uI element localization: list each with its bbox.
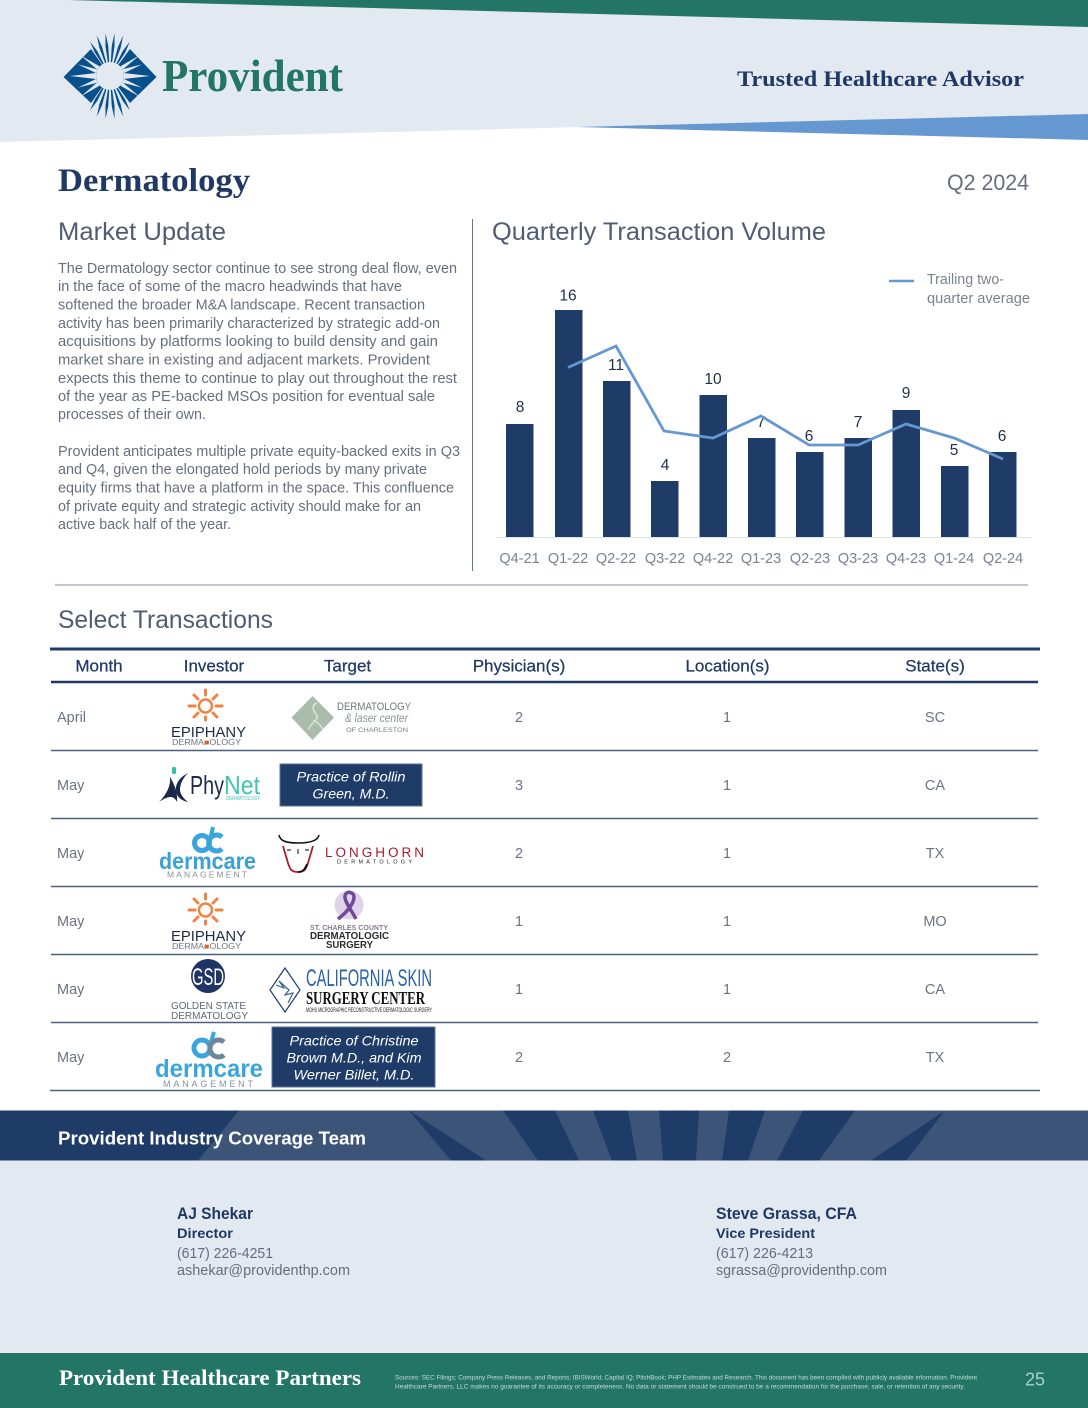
- bar chart: 10: [704, 371, 722, 388]
- heading: select transactions: Select Transactions: [58, 606, 273, 634]
- target box: Practice of Rollin Green: Practice of Rollin: [296, 768, 406, 784]
- row: May, Dermcare and Longhorn: TX: [926, 846, 945, 862]
- text block: market commentary: equity firms that have a platform in the space. This confluence: [58, 480, 454, 496]
- row: April: 2: [515, 710, 523, 726]
- bar chart: Q2-24: [983, 551, 1023, 567]
- logo: Dermatology and Laser Center of Charleston: [292, 696, 412, 740]
- contact: AJ Shekar: [177, 1205, 350, 1279]
- logo: PhyNet Dermatology: DERMATOLOGY: [226, 796, 260, 802]
- row: May, Golden State and California Skin: May: [57, 982, 85, 998]
- text block: market commentary: of the year as PE-backed MSOs position for eventual sale: [58, 389, 435, 405]
- bar chart: Q3-23: [838, 551, 878, 567]
- panel: quarterly transaction volume: [492, 218, 1032, 567]
- text block: market commentary: and Q4, given the elongated hold periods by many private: [58, 462, 427, 478]
- chart legend: Trailing two-: [927, 272, 1004, 288]
- text block: market commentary: active back half of the year.: [58, 517, 231, 533]
- logo: Dermatology and Laser Center of Charleston: OF CHARLESTON: [346, 728, 408, 734]
- heading: market update: Market Update: [58, 218, 226, 246]
- row: May, Golden State and California Skin: 1: [515, 982, 523, 998]
- footer disclaimer: [395, 1374, 977, 1390]
- row: May, Dermcare and Longhorn: [57, 827, 945, 880]
- heading: quarterly transaction volume: Quarterly Transaction Volume: [492, 218, 826, 246]
- contact: Steve Grassa: Steve Grassa, CFA: [716, 1205, 857, 1223]
- logo: California Skin Surgery Center: SURGERY CENTER: [306, 988, 426, 1008]
- text block: market commentary: in the face of some of the macro headwinds that have: [58, 279, 402, 295]
- footer disclaimer: Healthcare Partners, LLC makes no guarantee of its accuracy or completeness. No data or statement should be construed to be a recommendation for the purchase, sale, or retention of any security.: [395, 1384, 965, 1390]
- row: May, Golden State and California Skin: CA: [925, 982, 945, 998]
- row: May, PhyNet: CA: [925, 778, 945, 794]
- text block: market commentary: market share in existing and adjacent markets. Provident: [58, 352, 430, 368]
- logo: Epiphany Dermatology: [171, 690, 246, 747]
- table header: Physician(s): [473, 656, 565, 676]
- logo: PhyNet Dermatology: Phy: [190, 770, 224, 800]
- row: April: 1: [723, 710, 731, 726]
- header banner: [0, 0, 1088, 142]
- logo: PhyNet Dermatology: [159, 767, 261, 802]
- target box: Practice of Rollin Green: [280, 764, 422, 806]
- row: April: SC: [925, 710, 945, 726]
- row: May, Epiphany and St. Charles: 1: [515, 914, 523, 930]
- contact: Steve Grassa: [716, 1205, 887, 1279]
- bar chart: Q2-22: [596, 551, 636, 567]
- panel: select transactions table: [50, 649, 1040, 1090]
- row: May, Golden State and California Skin: 1: [723, 982, 731, 998]
- bar chart: 8: [516, 399, 524, 416]
- table header: Location(s): [685, 656, 770, 676]
- tagline: Trusted Healthcare Advisor: [737, 66, 1024, 91]
- target box: Practice of Christine Brown and Kim Werner Billet: [272, 1027, 435, 1087]
- footer disclaimer: Sources: SEC Filings; Company Press Releases, and Reports; IBISWorld; Capital IQ; PitchBook; PHP Estimates and Research. This document has been compiled with publicly available information. Provident: [395, 1374, 977, 1382]
- bar chart: 4: [661, 457, 670, 474]
- bar chart: Q1-22: [548, 551, 588, 567]
- footer brand name: Provident Healthcare Partners: [59, 1365, 361, 1390]
- text block: market commentary: The Dermatology sector continue to see strong deal flow, even: [58, 261, 457, 277]
- row: May, Dermcare and Practice of Christine Brown: TX: [926, 1050, 945, 1066]
- bar chart: Q1-24: [934, 551, 974, 567]
- logo: Longhorn Dermatology: [279, 835, 424, 872]
- bar chart: Q4-22: [693, 551, 733, 567]
- bar chart: 7: [757, 414, 765, 431]
- bar chart: Q4-21: [499, 551, 540, 567]
- logo: Dermcare Management: [155, 1032, 263, 1089]
- logo: Dermatology and Laser Center of Charleston: & laser center: [345, 711, 409, 725]
- row: May, Dermcare and Longhorn: 1: [723, 846, 731, 862]
- target box: Practice of Christine Brown and Kim Werner Billet: Werner Billet, M.D.: [294, 1066, 414, 1082]
- row: April: [57, 690, 945, 747]
- text block: market commentary: processes of their own.: [58, 407, 206, 423]
- row: May, Epiphany and St. Charles: May: [57, 914, 85, 930]
- date: Q2 2024: [947, 170, 1029, 195]
- bar chart: 9: [902, 385, 910, 402]
- bar chart: 16: [559, 288, 577, 304]
- text block: market commentary: of private equity and strategic activity should make for an: [58, 499, 421, 515]
- contact: Steve Grassa: Vice President: [716, 1225, 815, 1241]
- logo: Dermcare Management: dermcare: [155, 1055, 263, 1083]
- row: May, PhyNet: 3: [515, 778, 523, 794]
- contact: AJ Shekar: ashekar@providenthp.com: [177, 1262, 350, 1279]
- logo: Epiphany Dermatology: DERMA ■OLOGY: [172, 738, 242, 747]
- row: May, Dermcare and Practice of Christine Brown: May: [57, 1050, 85, 1066]
- logo: Dermcare Management: MANAGEMENT: [163, 1079, 254, 1089]
- panel: coverage team background: [0, 1160, 1088, 1353]
- chart legend: [889, 272, 1030, 307]
- logo: Longhorn Dermatology: DERMATOLOGY: [337, 860, 412, 866]
- target box: Practice of Christine Brown and Kim Werner Billet: Practice of Christine: [290, 1032, 419, 1048]
- contact: AJ Shekar: (617) 226-4251: [177, 1245, 273, 1262]
- bar chart: Q3-22: [645, 551, 685, 567]
- logo: St. Charles County Dermatologic Surgery: DERMATOLOGIC: [310, 931, 389, 942]
- table header: Target: [324, 656, 371, 676]
- footer band: [0, 1353, 1088, 1408]
- bar chart: 6: [998, 428, 1006, 445]
- table header: Month: [75, 656, 123, 676]
- logo: California Skin Surgery Center: CALIFORNIA SKIN: [306, 965, 432, 992]
- bar chart: Q4-23: [886, 551, 926, 567]
- logo: Golden State Dermatology: DERMATOLOGY: [171, 1011, 248, 1022]
- logo: Dermcare Management: [159, 827, 256, 880]
- table header: Investor: [184, 656, 245, 676]
- logo wordmark: Provident: [162, 51, 343, 101]
- logo: Longhorn Dermatology: LONGHORN: [325, 845, 424, 860]
- logo: Epiphany Dermatology: DERMA ■OLOGY: [172, 942, 242, 951]
- bar chart: 6: [805, 428, 813, 445]
- row: May, PhyNet: May: [57, 778, 85, 794]
- row: May, Dermcare and Practice of Christine Brown: 2: [515, 1050, 523, 1066]
- logo: Epiphany Dermatology: EPIPHANY: [171, 724, 246, 741]
- chart legend: quarter average: [927, 291, 1030, 307]
- banner: Provident Industry Coverage Team: [0, 1110, 1088, 1160]
- contact: Steve Grassa: (617) 226-4213: [716, 1245, 813, 1262]
- table header: State(s): [905, 656, 965, 676]
- contact: AJ Shekar: Director: [177, 1225, 234, 1241]
- row: May, PhyNet: 1: [723, 778, 731, 794]
- row: April: April: [57, 710, 86, 726]
- panel: market update: [58, 218, 460, 533]
- logo: Dermcare Management: MANAGEMENT: [167, 870, 247, 880]
- bar chart: 7: [854, 414, 862, 431]
- logo: California Skin Surgery Center: [270, 965, 432, 1014]
- logo: Dermcare Management: dermcare: [159, 848, 256, 874]
- text block: market commentary: activity has been primarily characterized by strategic add-on: [58, 316, 440, 332]
- logo: St. Charles County Dermatologic Surgery: [310, 890, 389, 951]
- text block: market commentary: expects this theme to continue to play out throughout the rest: [58, 371, 457, 387]
- page title: Dermatology: [58, 163, 251, 199]
- target box: Practice of Rollin Green: Green, M.D.: [312, 786, 390, 802]
- target box: Practice of Christine Brown and Kim Werner Billet: Brown M.D., and Kim: [286, 1050, 422, 1066]
- text block: market commentary: softened the broader M&A landscape. Recent transaction: [58, 298, 425, 314]
- text block: market commentary: [58, 261, 460, 533]
- bar chart: Q2-23: [790, 551, 830, 567]
- contact: AJ Shekar: AJ Shekar: [177, 1205, 254, 1223]
- row: May, Dermcare and Longhorn: 2: [515, 846, 523, 862]
- logo: Golden State Dermatology: [171, 959, 248, 1022]
- logo: St. Charles County Dermatologic Surgery: SURGERY: [326, 940, 373, 951]
- contact: Steve Grassa: sgrassa@providenthp.com: [716, 1262, 887, 1279]
- bar chart: 5: [950, 442, 958, 459]
- row: May, Dermcare and Practice of Christine Brown: [57, 1027, 945, 1089]
- text block: market commentary: acquisitions by platforms looking to build density and gain: [58, 334, 438, 350]
- row: May, PhyNet: [57, 764, 945, 806]
- bar chart: [496, 288, 1032, 567]
- row: May, Epiphany and St. Charles: [57, 890, 947, 951]
- text block: market commentary: Provident anticipates multiple private equity-backed exits in Q3: [58, 444, 460, 460]
- logo: Provident: [64, 33, 343, 119]
- logo: California Skin Surgery Center: MOHS MICROGRAPHIC RECONSTRUCTIVE DERMATOLOGIC SURGERY: [306, 1008, 432, 1014]
- banner: Provident Industry Coverage Team: Provident Industry Coverage Team: [58, 1128, 366, 1148]
- logo: Golden State Dermatology: GOLDEN STATE: [171, 1001, 246, 1012]
- trailing average line: [568, 346, 1003, 459]
- icon: sunburst diamond: [64, 33, 156, 119]
- table header: [75, 656, 965, 676]
- logo: Golden State Dermatology: GSD: [192, 964, 224, 991]
- row: May, Golden State and California Skin: [57, 959, 945, 1022]
- logo: Dermatology and Laser Center of Charleston: DERMATOLOGY: [337, 701, 412, 713]
- logo: St. Charles County Dermatologic Surgery: ST. CHARLES COUNTY: [310, 925, 388, 932]
- logo: Epiphany Dermatology: EPIPHANY: [171, 928, 246, 945]
- bar chart: Q1-23: [741, 551, 781, 567]
- row: May, Epiphany and St. Charles: MO: [923, 914, 947, 930]
- row: May, Dermcare and Longhorn: May: [57, 846, 85, 862]
- bar chart: 11: [608, 357, 624, 374]
- logo: PhyNet Dermatology: Net: [224, 770, 261, 800]
- row: May, Epiphany and St. Charles: 1: [723, 914, 731, 930]
- logo: Epiphany Dermatology: [171, 894, 246, 951]
- page number: 25: [1025, 1370, 1045, 1390]
- row: May, Dermcare and Practice of Christine Brown: 2: [723, 1050, 731, 1066]
